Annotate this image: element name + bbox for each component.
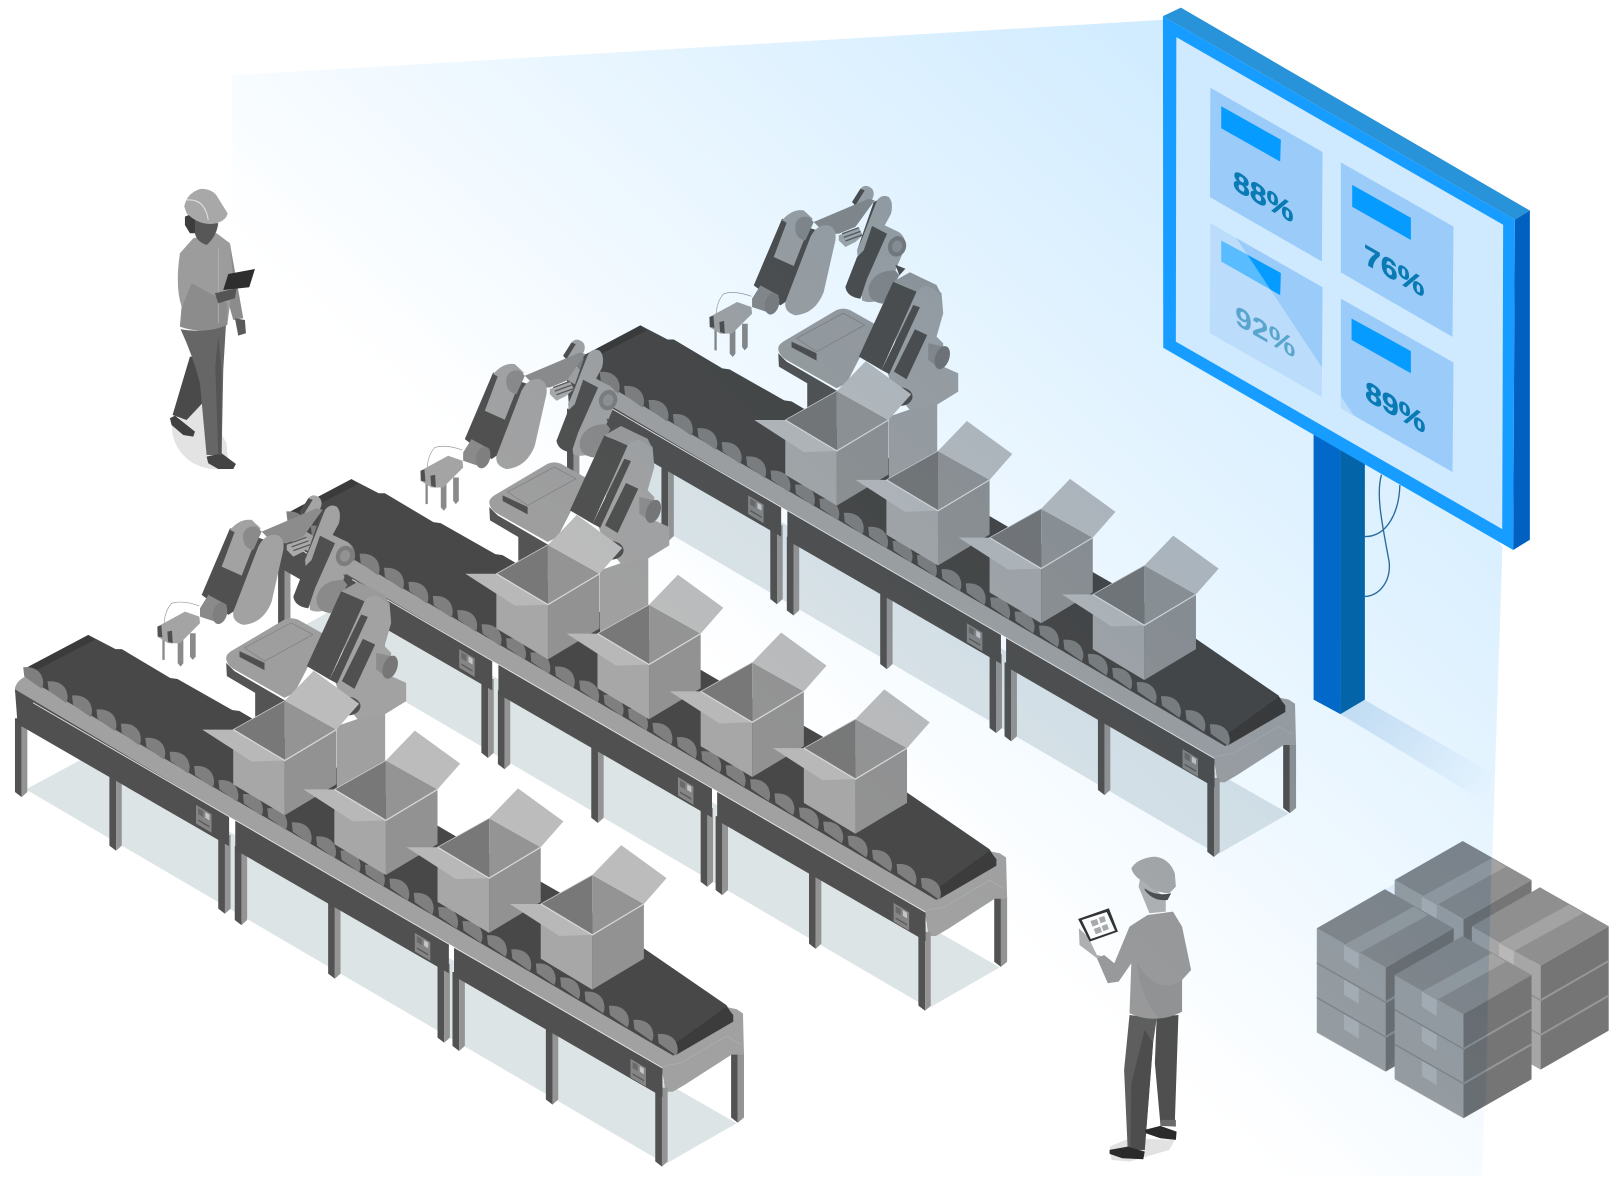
light projection from the dashboard xyxy=(232,20,1502,1176)
pole shadow on floor xyxy=(1340,700,1493,807)
cables behind the screen xyxy=(1365,475,1400,596)
panel: 88% xyxy=(1210,88,1323,261)
panel: 92%: 92% xyxy=(1235,299,1295,365)
monitor frame xyxy=(1163,8,1530,550)
panel: 89%: 89% xyxy=(1365,375,1425,440)
conveyor line: middle row xyxy=(278,340,1007,1011)
panel: 89% xyxy=(1341,299,1454,472)
dashboard monitor xyxy=(1163,8,1530,550)
panel: 76% xyxy=(1341,162,1454,337)
conveyor line: front row xyxy=(15,495,744,1167)
panel: 92% xyxy=(1210,223,1323,397)
panel: 76%: 76% xyxy=(1364,238,1424,304)
screen glare xyxy=(1210,223,1354,415)
stacked cardboard boxes xyxy=(1317,841,1609,1118)
conveyor line: back row xyxy=(567,186,1296,857)
worker with tablet facing the dashboard xyxy=(1078,857,1191,1162)
worker with hard hat and tablet xyxy=(170,189,255,469)
panel: 88%: 88% xyxy=(1233,164,1293,230)
screen xyxy=(1176,37,1503,529)
monitor pole xyxy=(1314,428,1365,714)
